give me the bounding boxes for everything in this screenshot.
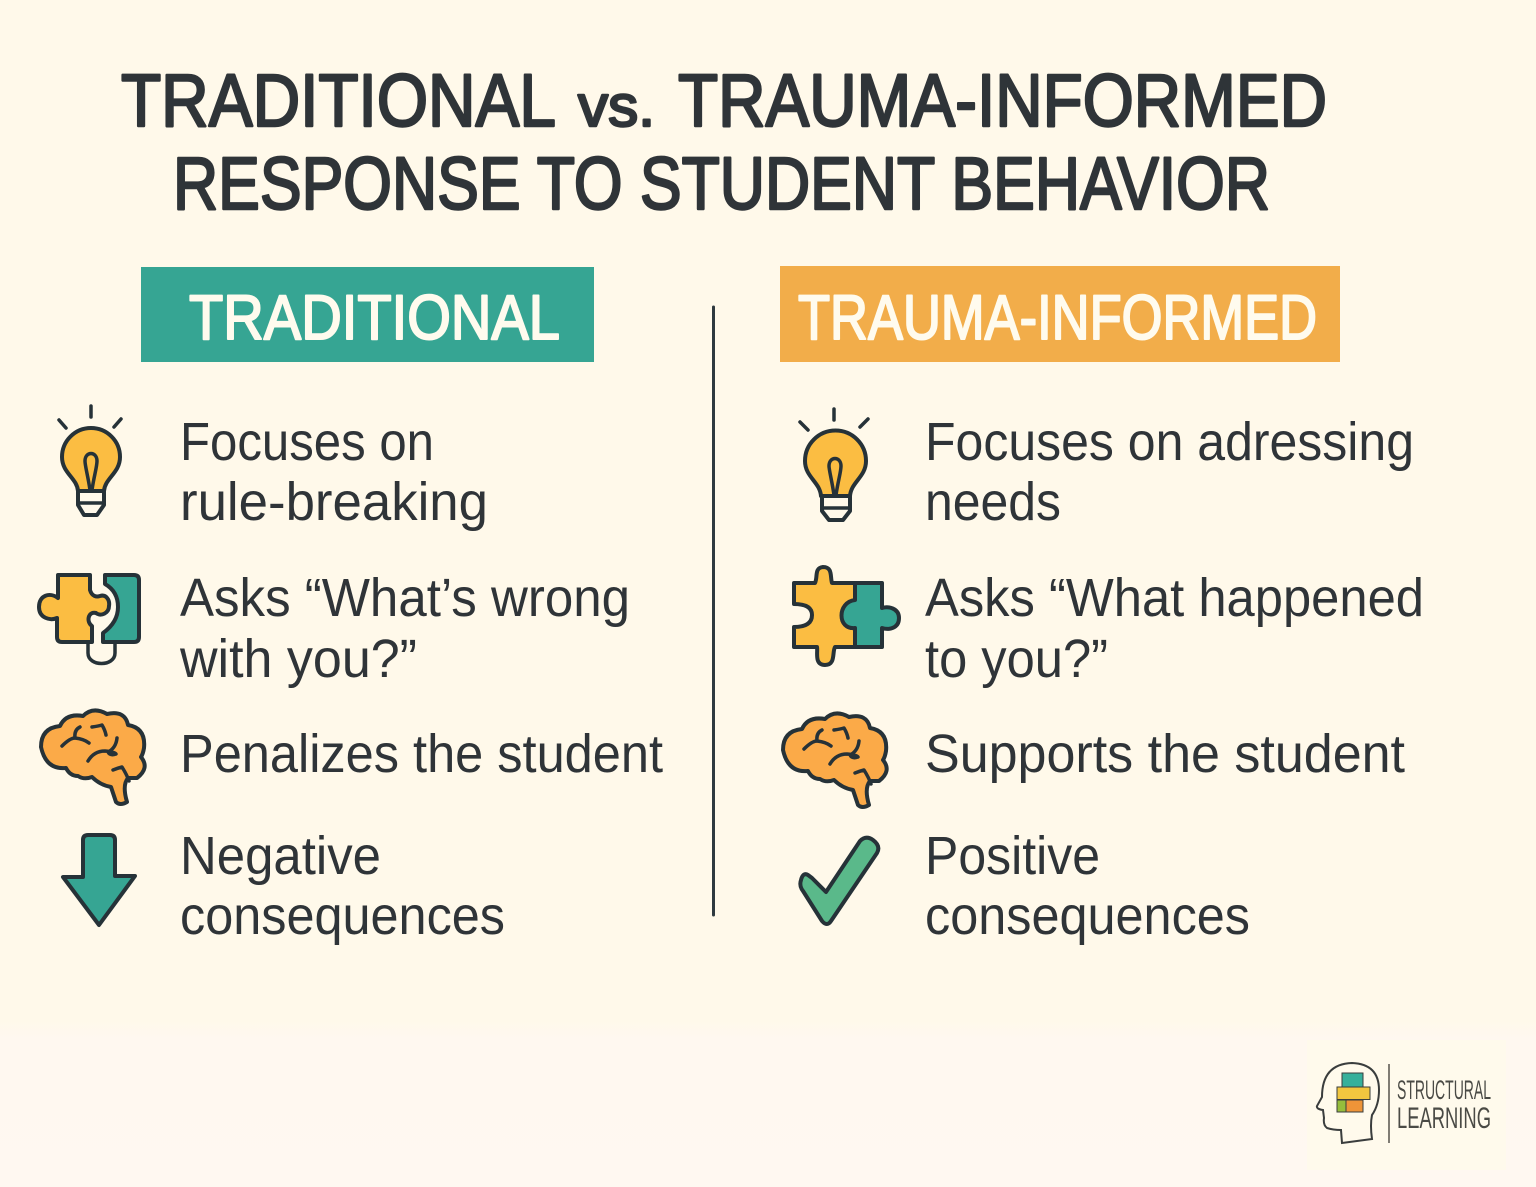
text: focuses on rule-breaking: rule-breaking	[180, 472, 488, 532]
icon: mismatched puzzle pieces	[39, 575, 139, 664]
text: negative consequences: Negative	[180, 826, 381, 886]
text: negative consequences: consequences	[180, 886, 505, 946]
logo: structural learning	[1307, 1040, 1506, 1170]
title: TRAUMA-INFORMED	[678, 59, 1327, 142]
divider	[712, 307, 715, 915]
text: focuses on rule-breaking: Focuses on	[180, 412, 434, 472]
text: asks what happened: to you?”	[925, 629, 1108, 689]
text: penalizes the student: Penalizes the student	[180, 724, 663, 784]
text: asks what's wrong	[179, 568, 630, 689]
text: focuses on adressing needs: Focuses on adressing	[925, 412, 1414, 472]
title: TRADITIONAL	[121, 59, 556, 142]
panel: trauma-informed column	[780, 266, 1424, 946]
icon: down arrow	[63, 835, 135, 925]
heading: trauma-informed	[780, 266, 1340, 362]
text: focuses on adressing needs	[925, 412, 1414, 532]
logo wordmark	[1397, 1075, 1491, 1135]
text: focuses on rule-breaking	[180, 412, 488, 532]
text: asks what happened	[925, 568, 1424, 689]
heading: traditional: TRADITIONAL	[189, 283, 560, 353]
icon: check mark	[800, 838, 878, 924]
icon: light bulb	[800, 409, 868, 520]
title: vs.	[578, 74, 655, 139]
text: focuses on adressing needs: needs	[925, 472, 1061, 532]
text: supports the student: Supports the student	[925, 724, 1405, 784]
heading: trauma-informed: TRAUMA-INFORMED	[798, 283, 1317, 353]
text: asks what's wrong: with you?”	[179, 629, 417, 689]
heading: traditional	[141, 267, 594, 362]
text: positive consequences	[925, 826, 1250, 946]
text: asks what's wrong: Asks “What’s wrong	[180, 568, 630, 628]
text: positive consequences: consequences	[925, 886, 1250, 946]
icon: joined puzzle pieces	[794, 567, 899, 665]
title	[121, 59, 1327, 225]
text: asks what happened: Asks “What happened	[925, 568, 1424, 628]
icon: head with blocks	[1317, 1063, 1379, 1143]
text: positive consequences: Positive	[925, 826, 1100, 886]
text: negative consequences	[180, 826, 505, 946]
icon: brain	[783, 713, 887, 807]
icon: light bulb	[59, 406, 121, 515]
panel: traditional column	[39, 267, 663, 946]
title: RESPONSE TO STUDENT BEHAVIOR	[173, 142, 1270, 225]
icon: brain	[41, 710, 145, 804]
